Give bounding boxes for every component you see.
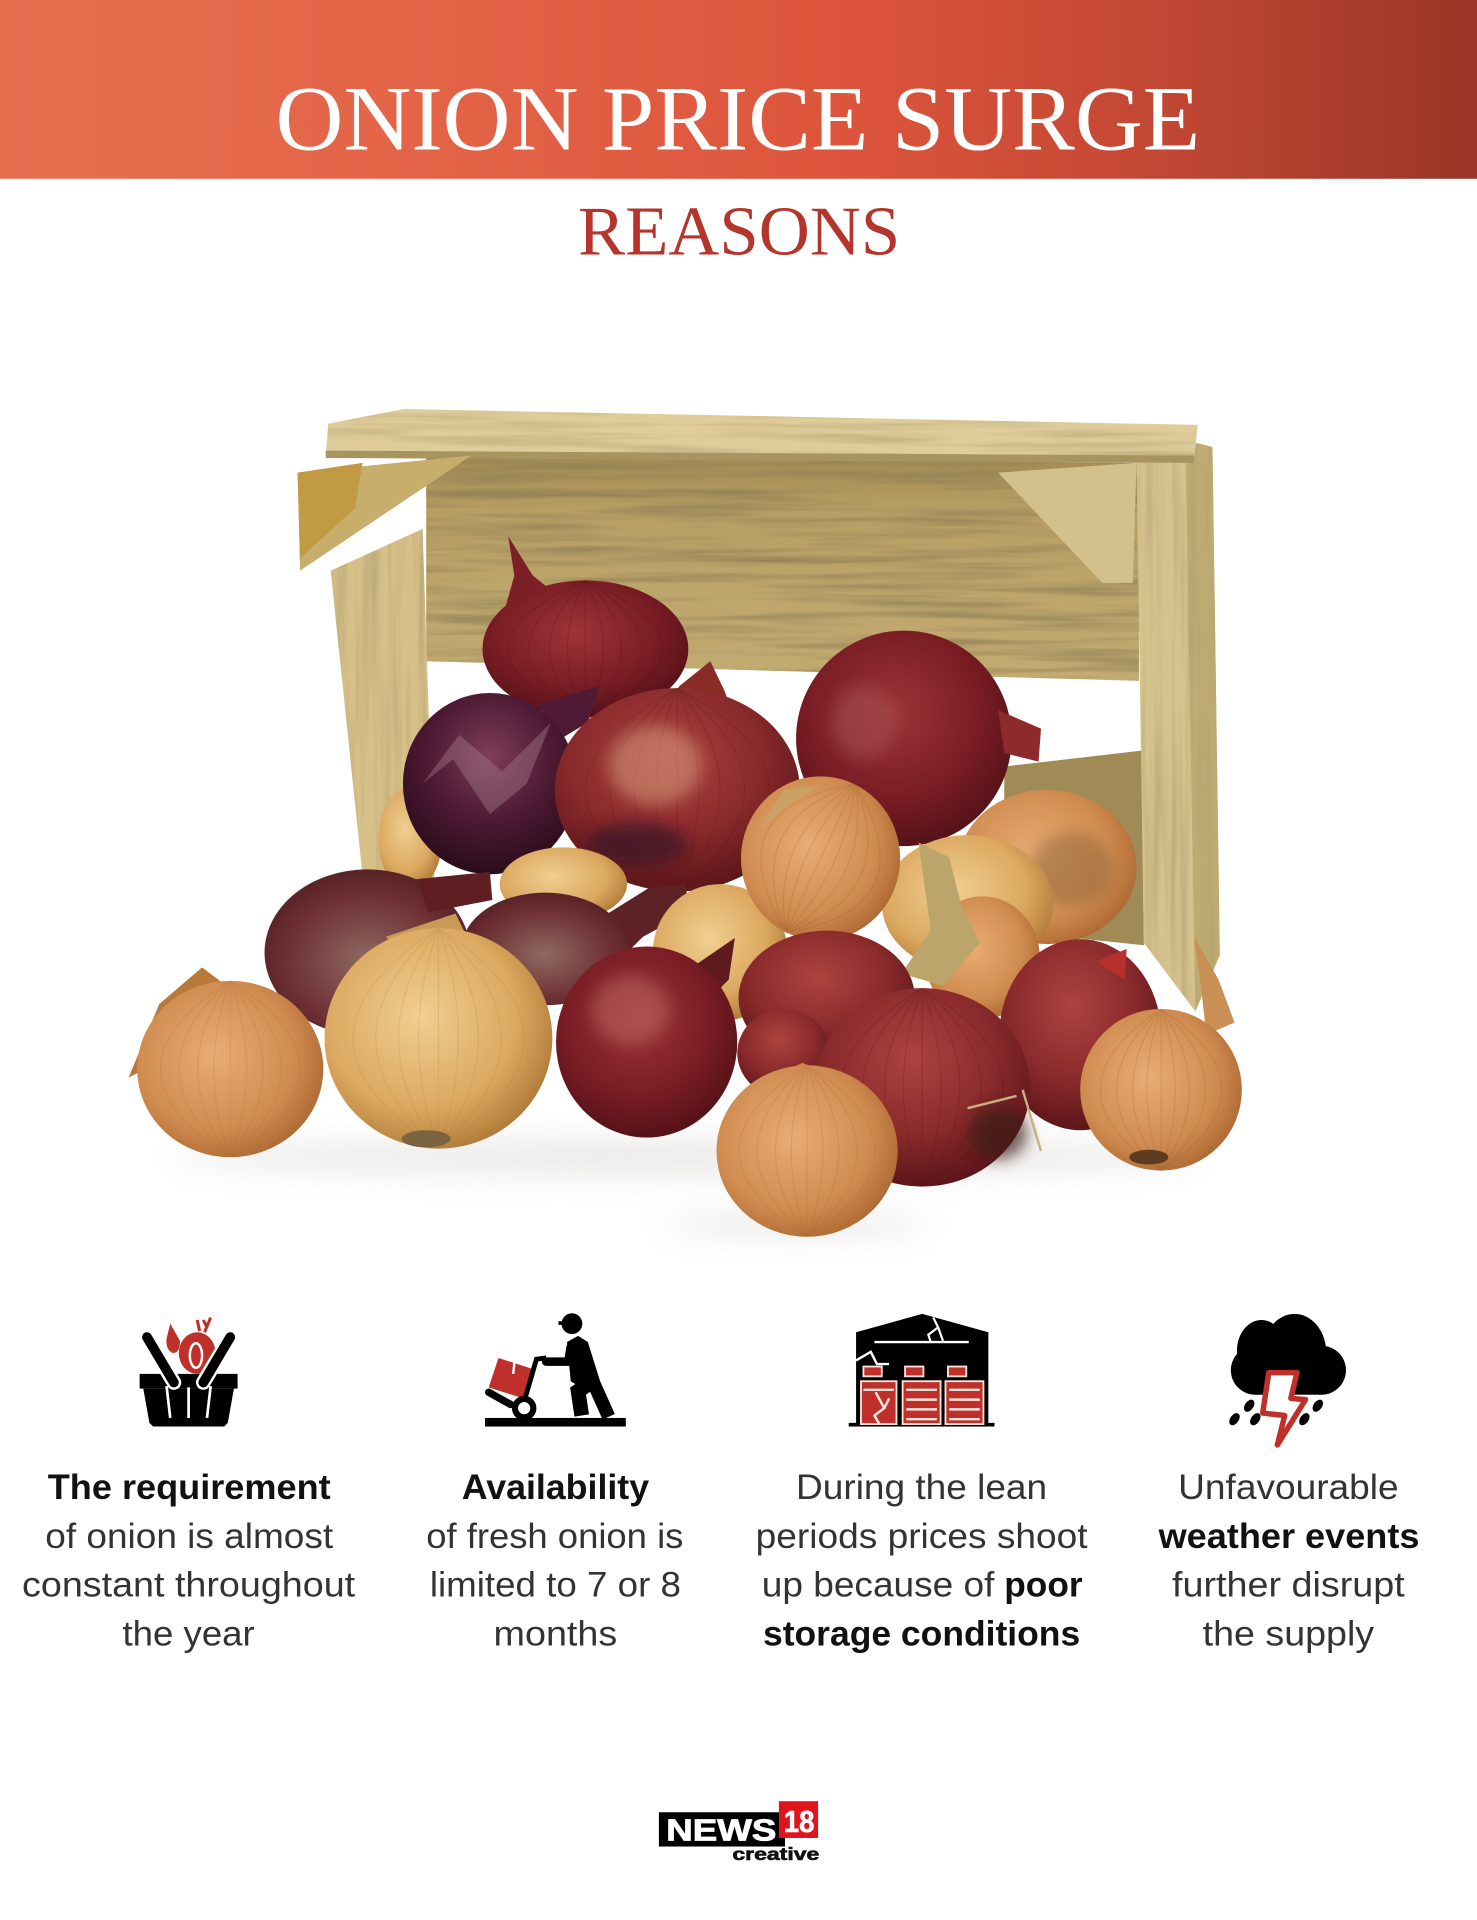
text block: weather: Unfavourable bbox=[1178, 1467, 1399, 1507]
onion: dark purple bbox=[403, 686, 600, 874]
ground shadow bbox=[171, 1138, 1200, 1237]
onion: orange top bbox=[732, 759, 909, 958]
onion: red right bbox=[999, 939, 1161, 1130]
logo: News18 creative bbox=[659, 1801, 819, 1864]
title: ONION PRICE SURGE bbox=[276, 67, 1200, 169]
text block: availability: of fresh onion is bbox=[426, 1516, 683, 1556]
text block: requirement: The requirement bbox=[48, 1467, 331, 1507]
text block: requirement bbox=[22, 1467, 355, 1654]
onion: large red foreground bbox=[814, 988, 1041, 1187]
text block: requirement: constant throughout bbox=[22, 1565, 355, 1605]
logo: News18 creative: creative bbox=[732, 1844, 819, 1864]
onion: yellow sliver bbox=[378, 787, 442, 890]
onion: red crinkled bbox=[737, 931, 915, 1097]
icon: worker with trolley bbox=[485, 1313, 626, 1427]
text block: availability: limited to 7 or 8 bbox=[430, 1565, 681, 1605]
text block: requirement: of onion is almost bbox=[45, 1516, 333, 1556]
text block: weather bbox=[1158, 1467, 1419, 1654]
text block: availability: Availability bbox=[462, 1467, 649, 1507]
onion: purple brown bbox=[462, 884, 688, 1005]
onion: striped red bbox=[555, 661, 800, 891]
onion: red back bbox=[483, 536, 688, 718]
icon: basket with onions bbox=[140, 1318, 238, 1427]
text block: lean periods bbox=[756, 1467, 1088, 1654]
text block: lean periods: poor bbox=[1004, 1565, 1083, 1605]
header band bbox=[0, 0, 1477, 179]
onion: spotted yellow bbox=[958, 790, 1137, 944]
onion: yellow middle bbox=[653, 884, 787, 1021]
text block: lean periods: up because of bbox=[762, 1565, 995, 1605]
onion: right shallot bbox=[1080, 937, 1242, 1171]
onion: red front bbox=[556, 938, 737, 1138]
onion: left shallot bbox=[129, 967, 323, 1157]
photo: crate of onions bbox=[129, 409, 1242, 1237]
logo: News18 creative: 18 bbox=[784, 1805, 814, 1839]
text block: requirement: the year bbox=[122, 1614, 255, 1654]
text block: lean periods: storage conditions bbox=[763, 1614, 1080, 1654]
onion: brownish red left bbox=[265, 869, 492, 1036]
onion: front shallot bbox=[716, 1063, 898, 1237]
text block: availability: months bbox=[494, 1614, 617, 1654]
text block: weather: weather events bbox=[1158, 1516, 1419, 1556]
icon: damaged warehouse bbox=[849, 1314, 994, 1427]
text block: lean periods: During the lean bbox=[796, 1467, 1047, 1507]
logo: News18 creative: NEWS bbox=[666, 1813, 776, 1847]
subtitle: REASONS bbox=[578, 194, 900, 271]
text block: availability bbox=[426, 1467, 683, 1654]
onion: big yellow bbox=[325, 913, 552, 1149]
text block: lean periods: periods prices shoot bbox=[756, 1516, 1088, 1556]
text block: weather: further disrupt bbox=[1172, 1565, 1405, 1605]
icon: storm cloud with lightning bbox=[1227, 1314, 1346, 1445]
text block: weather: the supply bbox=[1203, 1614, 1374, 1654]
onion: yellow center bbox=[500, 847, 627, 921]
onion: orange with stem bbox=[901, 842, 1040, 1019]
onion: yellow right bbox=[882, 835, 1053, 972]
onion: red large right bbox=[796, 631, 1041, 846]
wooden crate bbox=[298, 409, 1220, 1011]
